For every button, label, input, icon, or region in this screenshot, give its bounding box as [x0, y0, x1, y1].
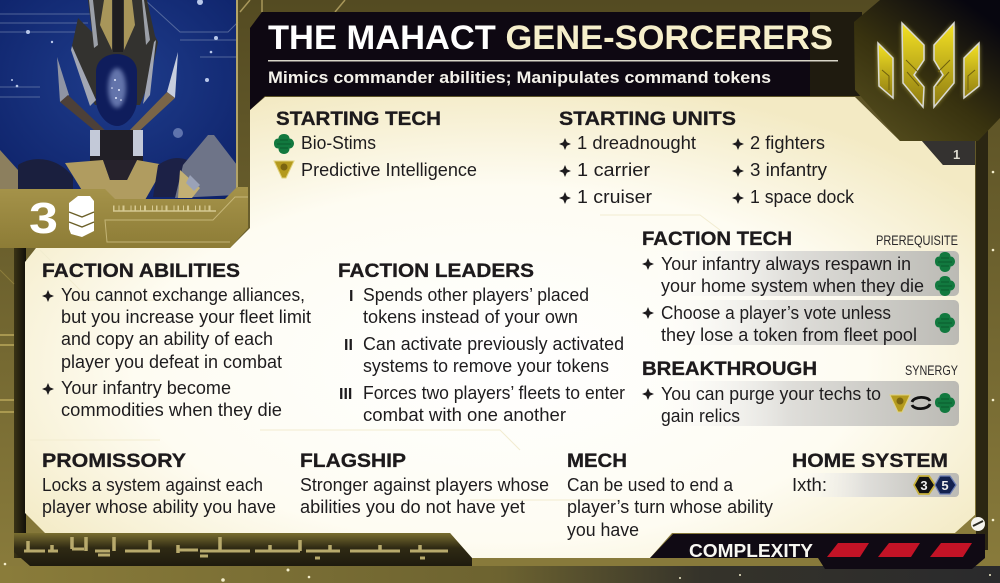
panel: title banner: [250, 12, 862, 110]
section: faction abilities: Your infantry become: [61, 378, 231, 398]
section: starting tech: [274, 109, 477, 180]
section: breakthrough: You can purge your techs to: [661, 384, 881, 404]
section: promissory: PROMISSORY: [42, 451, 186, 472]
section: faction tech: your home system when they die: [661, 276, 924, 296]
section: starting units: 2 fighters: [750, 133, 825, 153]
complexity rating: [827, 543, 972, 557]
section: promissory: [42, 451, 276, 517]
section: starting units: [559, 109, 855, 207]
tab: card number: 1: [953, 147, 960, 162]
icon: biotic tech: [274, 134, 294, 154]
section: faction tech: Choose a player’s vote unless: [661, 303, 891, 323]
section: flagship: FLAGSHIP: [300, 451, 406, 472]
panel: cream card body: [25, 97, 975, 558]
section: faction leaders: tokens instead of your own: [363, 307, 578, 327]
section: faction leaders: II: [344, 337, 353, 354]
section: faction leaders: systems to remove your tokens: [363, 356, 609, 376]
section: faction abilities: but you increase your fleet limit: [61, 307, 311, 327]
section: faction leaders: Forces two players’ fleets to enter: [363, 383, 625, 403]
influence value: 3: [29, 194, 58, 243]
section: faction abilities: player you defeat in combat: [61, 352, 282, 372]
icon: resources: [914, 476, 935, 494]
section: mech: Can be used to end a: [567, 475, 734, 495]
portrait: Mahact figure: [0, 0, 238, 200]
section: breakthrough: [642, 359, 959, 426]
section: starting tech: STARTING TECH: [276, 109, 441, 130]
circuit traces on card: [30, 215, 720, 500]
section: promissory: Locks a system against each: [42, 475, 263, 495]
tab: card number: [922, 141, 975, 165]
section: breakthrough: BREAKTHROUGH: [642, 359, 817, 380]
icon: set symbol: [955, 515, 985, 533]
section: home system: HOME SYSTEM: [792, 451, 948, 472]
section: starting units: 3 infantry: [750, 160, 827, 180]
panel: complexity: [650, 534, 985, 569]
section: mech: [567, 451, 773, 540]
subtitle: Mimics commander abilities; Manipulates command tokens: [268, 68, 771, 87]
alien script: [113, 208, 216, 211]
section: faction leaders: combat with one another: [363, 405, 566, 425]
section: faction tech: they lose a token from fleet pool: [661, 325, 917, 345]
section: faction leaders: FACTION LEADERS: [338, 261, 534, 282]
section: faction leaders: Spends other players’ placed: [363, 285, 589, 305]
section: flagship: Stronger against players whose: [300, 475, 549, 495]
section: starting tech: Predictive Intelligence: [301, 160, 477, 180]
complexity label: COMPLEXITY: [689, 540, 814, 561]
section: faction leaders: III: [339, 386, 352, 403]
section: flagship: abilities you do not have yet: [300, 497, 525, 517]
section: flagship: [300, 451, 549, 517]
title: THE MAHACT GENE-SORCERERS: [268, 19, 833, 57]
section: home system: [790, 451, 959, 497]
section: faction tech: [642, 229, 959, 345]
section: faction abilities: [42, 261, 311, 420]
section: faction abilities: and copy an ability of each: [61, 329, 273, 349]
section: breakthrough: gain relics: [661, 406, 740, 426]
section: starting units: 1 space dock: [750, 187, 855, 207]
section: breakthrough: SYNERGY: [905, 362, 959, 378]
strip: alien script footer: [14, 533, 472, 566]
section: starting tech: Bio-Stims: [301, 133, 376, 153]
section: faction leaders: I: [349, 288, 353, 305]
section: mech: MECH: [567, 451, 627, 472]
section: faction abilities: FACTION ABILITIES: [42, 261, 240, 282]
section: starting units: STARTING UNITS: [559, 109, 736, 130]
icon: biotic prerequisites: [935, 252, 955, 333]
icon: influence: [935, 476, 956, 494]
icon: synergy: [890, 393, 955, 413]
emblem: Mahact crest: [854, 0, 1000, 141]
section: faction abilities: You cannot exchange alliances,: [61, 285, 305, 305]
section: starting units: 1 carrier: [577, 160, 650, 180]
icon: cybernetic tech: [274, 161, 294, 178]
section: starting units: 1 dreadnought: [577, 133, 696, 153]
section: starting units: 1 cruiser: [577, 187, 652, 207]
icon: influence: 5: [941, 478, 949, 493]
section: promissory: player whose ability you have: [42, 497, 276, 517]
section: home system: Ixth:: [792, 475, 827, 495]
icon: influence tokens: [69, 196, 94, 237]
section: mech: you have: [567, 520, 639, 540]
panel: influence band: [0, 187, 248, 248]
section: faction leaders: Can activate previously activated: [363, 334, 624, 354]
section: mech: player’s turn whose ability: [567, 497, 773, 517]
section: faction tech: PREREQUISITE: [876, 232, 958, 248]
section: faction tech: Your infantry always respawn in: [661, 254, 911, 274]
section: faction leaders: [338, 261, 625, 425]
section: faction abilities: commodities when they die: [61, 400, 282, 420]
icon: resources: 3: [920, 478, 928, 493]
section: faction tech: FACTION TECH: [642, 229, 792, 250]
